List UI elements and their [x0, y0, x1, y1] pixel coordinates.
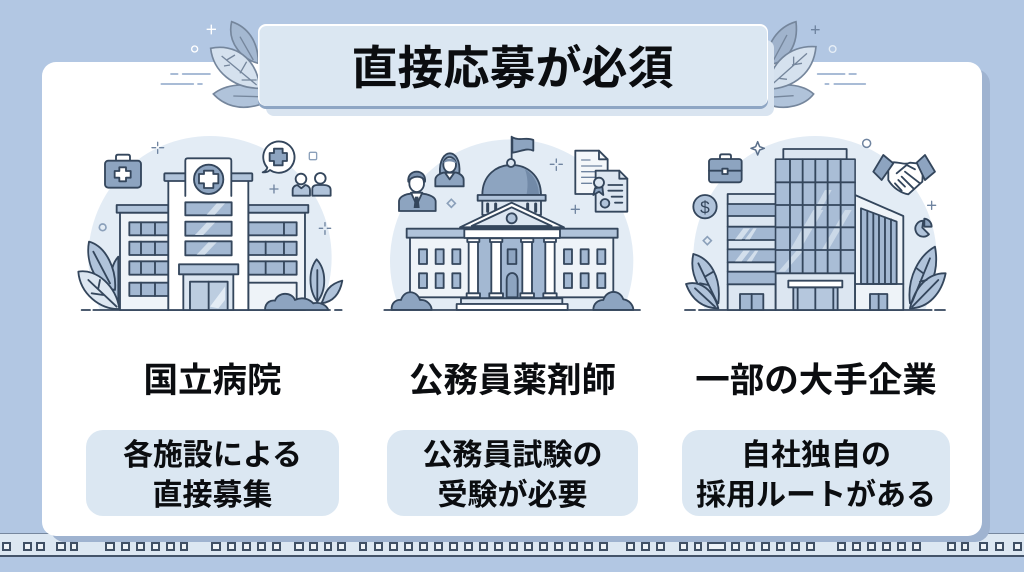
- dome: [478, 159, 546, 215]
- panel: hospital note: [86, 430, 339, 516]
- main white card: [42, 62, 990, 542]
- icon: pie chart: [915, 219, 932, 237]
- wings: [407, 229, 618, 297]
- bushes: [392, 292, 633, 310]
- left building: [728, 194, 776, 310]
- entrance: [179, 264, 238, 310]
- illustration: office buildings: [675, 136, 952, 390]
- right plants: [909, 247, 946, 308]
- icon: male official: [399, 172, 436, 211]
- left plants: [78, 242, 119, 309]
- portico: [457, 203, 568, 310]
- title banner: [258, 24, 774, 116]
- panel: company note: 自社独自の: [741, 439, 891, 472]
- panel: pharmacist note: [387, 430, 638, 516]
- illustration: hospital: [70, 136, 347, 390]
- icon: medical bag: [105, 155, 141, 188]
- panel: company note: [682, 430, 950, 516]
- icon: dollar coin: [693, 195, 717, 218]
- heading: public pharmacist: 公務員薬剤師: [409, 362, 616, 400]
- icon: staff people: [293, 173, 331, 196]
- panel: pharmacist note: 公務員試験の: [422, 439, 602, 472]
- left plants: [686, 254, 719, 308]
- illustration: government building: [375, 137, 648, 390]
- left wing: [117, 205, 168, 310]
- icon: handshake: [873, 155, 935, 194]
- right building: [855, 195, 903, 310]
- panel: hospital note: 直接募集: [152, 479, 272, 512]
- icon: documents and seal: [575, 151, 627, 212]
- panel: hospital note: 各施設による: [123, 439, 302, 472]
- panel: company note: 採用ルートがある: [696, 478, 936, 512]
- left leaf decoration: [161, 22, 262, 107]
- icon: briefcase: [709, 154, 742, 182]
- right leaf decoration: [767, 22, 865, 107]
- small sparkles: [99, 142, 331, 234]
- right plants and bush: [265, 259, 342, 310]
- heading: major companies: 一部の大手企業: [695, 362, 937, 400]
- central tower: [776, 149, 855, 310]
- heading: national hospital: 国立病院: [144, 362, 282, 400]
- small sparkles: [703, 139, 936, 245]
- central tower: [164, 158, 252, 310]
- title text: 直接応募が必須: [352, 42, 674, 94]
- panel: pharmacist note: 受験が必要: [438, 478, 588, 512]
- flag: [512, 137, 533, 160]
- icon: speech bubble with cross: [263, 141, 295, 173]
- small sparkles: [447, 159, 579, 213]
- right wing: [248, 205, 308, 310]
- icon: female official: [435, 153, 464, 186]
- icon: dollar coin: $: [700, 197, 710, 217]
- film strip border: [0, 533, 1024, 557]
